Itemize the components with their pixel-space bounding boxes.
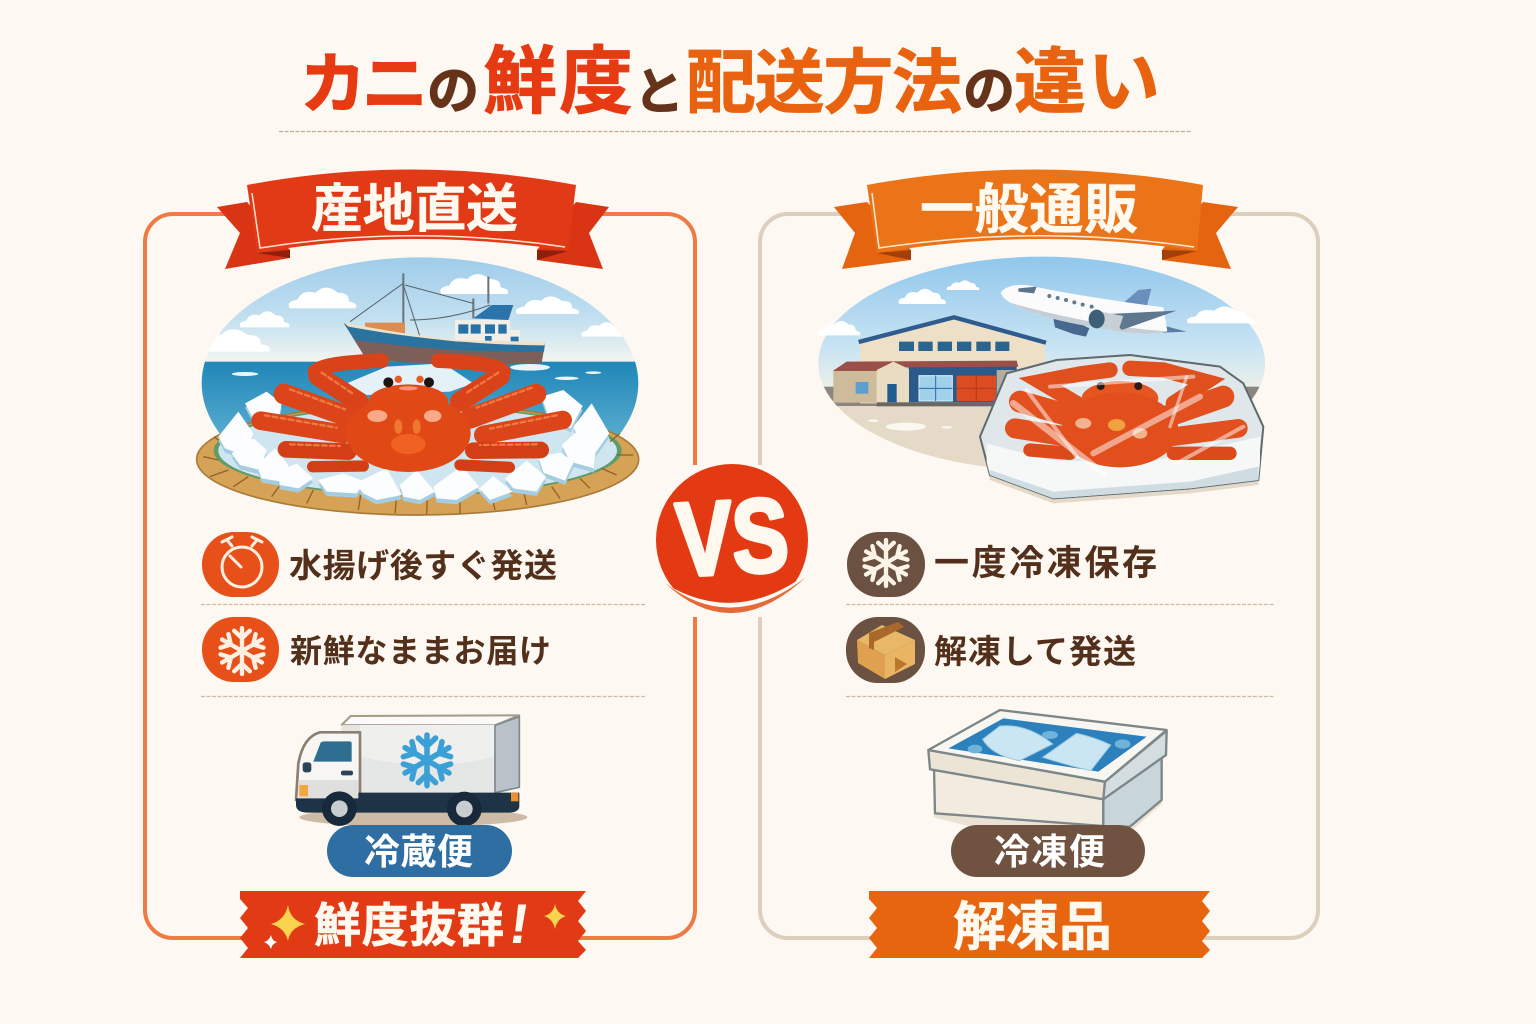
- icon: cardboard box: [846, 617, 925, 683]
- icon: sparkles: [264, 904, 566, 949]
- warehouse: [833, 317, 1046, 406]
- banner: 鮮度抜群!: !: [506, 892, 533, 955]
- illustration: warehouse, plane, wrapped frozen crab: [810, 253, 1277, 503]
- clouds: [189, 274, 626, 352]
- sea: [202, 362, 638, 436]
- fishing boat: [344, 273, 545, 364]
- title: 配送方法: [686, 44, 962, 122]
- banner: 解凍品: [869, 891, 1210, 958]
- banner: 解凍品: 解凍品: [953, 898, 1112, 957]
- banner: 一般通販: [834, 170, 1238, 269]
- pill: 冷蔵便: [327, 825, 512, 877]
- title: [300, 40, 1160, 123]
- feature row: 新鮮なままお届け: [202, 617, 551, 682]
- title: と: [634, 64, 684, 120]
- feature row: 一度冷凍保存: 一度冷凍保存: [934, 544, 1157, 583]
- pill: 冷凍便: [951, 825, 1145, 877]
- wicker tray: [197, 404, 639, 515]
- banner: 一般通販: 一般通販: [920, 180, 1138, 240]
- VS badge: VS: [673, 477, 791, 599]
- banner: 産地直送: [217, 170, 609, 269]
- feature row: 解凍して発送: [846, 617, 1136, 683]
- king crab: [261, 361, 563, 472]
- legs: [261, 361, 563, 467]
- carapace: [346, 376, 471, 472]
- banner: 鮮度抜群!: [240, 891, 586, 958]
- banner: 産地直送: 産地直送: [311, 181, 518, 239]
- wrapped frozen crab: [980, 355, 1263, 503]
- banner: 鮮度抜群!: 鮮度抜群: [314, 899, 504, 952]
- title: 鮮度: [483, 40, 633, 123]
- icon: snowflake: [847, 532, 925, 597]
- title: の: [427, 63, 479, 121]
- icon: snowflake: [202, 617, 279, 682]
- title: カニ: [300, 47, 428, 121]
- feature row: 一度冷凍保存: [847, 532, 1157, 597]
- feature row: 新鮮なままお届け: 新鮮なままお届け: [290, 633, 551, 669]
- clouds: [817, 280, 1255, 335]
- illustration: styrofoam box with frozen blocks: [928, 710, 1167, 832]
- crushed ice: [218, 363, 609, 504]
- plastic film: [1013, 377, 1243, 473]
- pill: 冷凍便: 冷凍便: [994, 831, 1105, 872]
- sky: [818, 256, 1265, 386]
- feature row: 水揚げ後すぐ発送: 水揚げ後すぐ発送: [289, 547, 557, 584]
- airplane: [1001, 285, 1187, 337]
- title: の: [963, 63, 1015, 121]
- title: 違い: [1014, 43, 1160, 123]
- illustration: refrigerated truck: [296, 715, 527, 827]
- feature row: 水揚げ後すぐ発送: [202, 532, 557, 597]
- feature row: 解凍して発送: 解凍して発送: [934, 633, 1136, 670]
- pill: 冷蔵便: 冷蔵便: [364, 831, 473, 872]
- panel: 産地直送: [145, 214, 695, 938]
- illustration: crab on ice with fishing boat: [189, 253, 657, 515]
- sky: [205, 257, 635, 362]
- icon: stopwatch: [202, 532, 279, 597]
- runway band and ground: [810, 387, 1277, 407]
- panel: 一般通販: [760, 214, 1318, 938]
- VS badge: [655, 464, 812, 617]
